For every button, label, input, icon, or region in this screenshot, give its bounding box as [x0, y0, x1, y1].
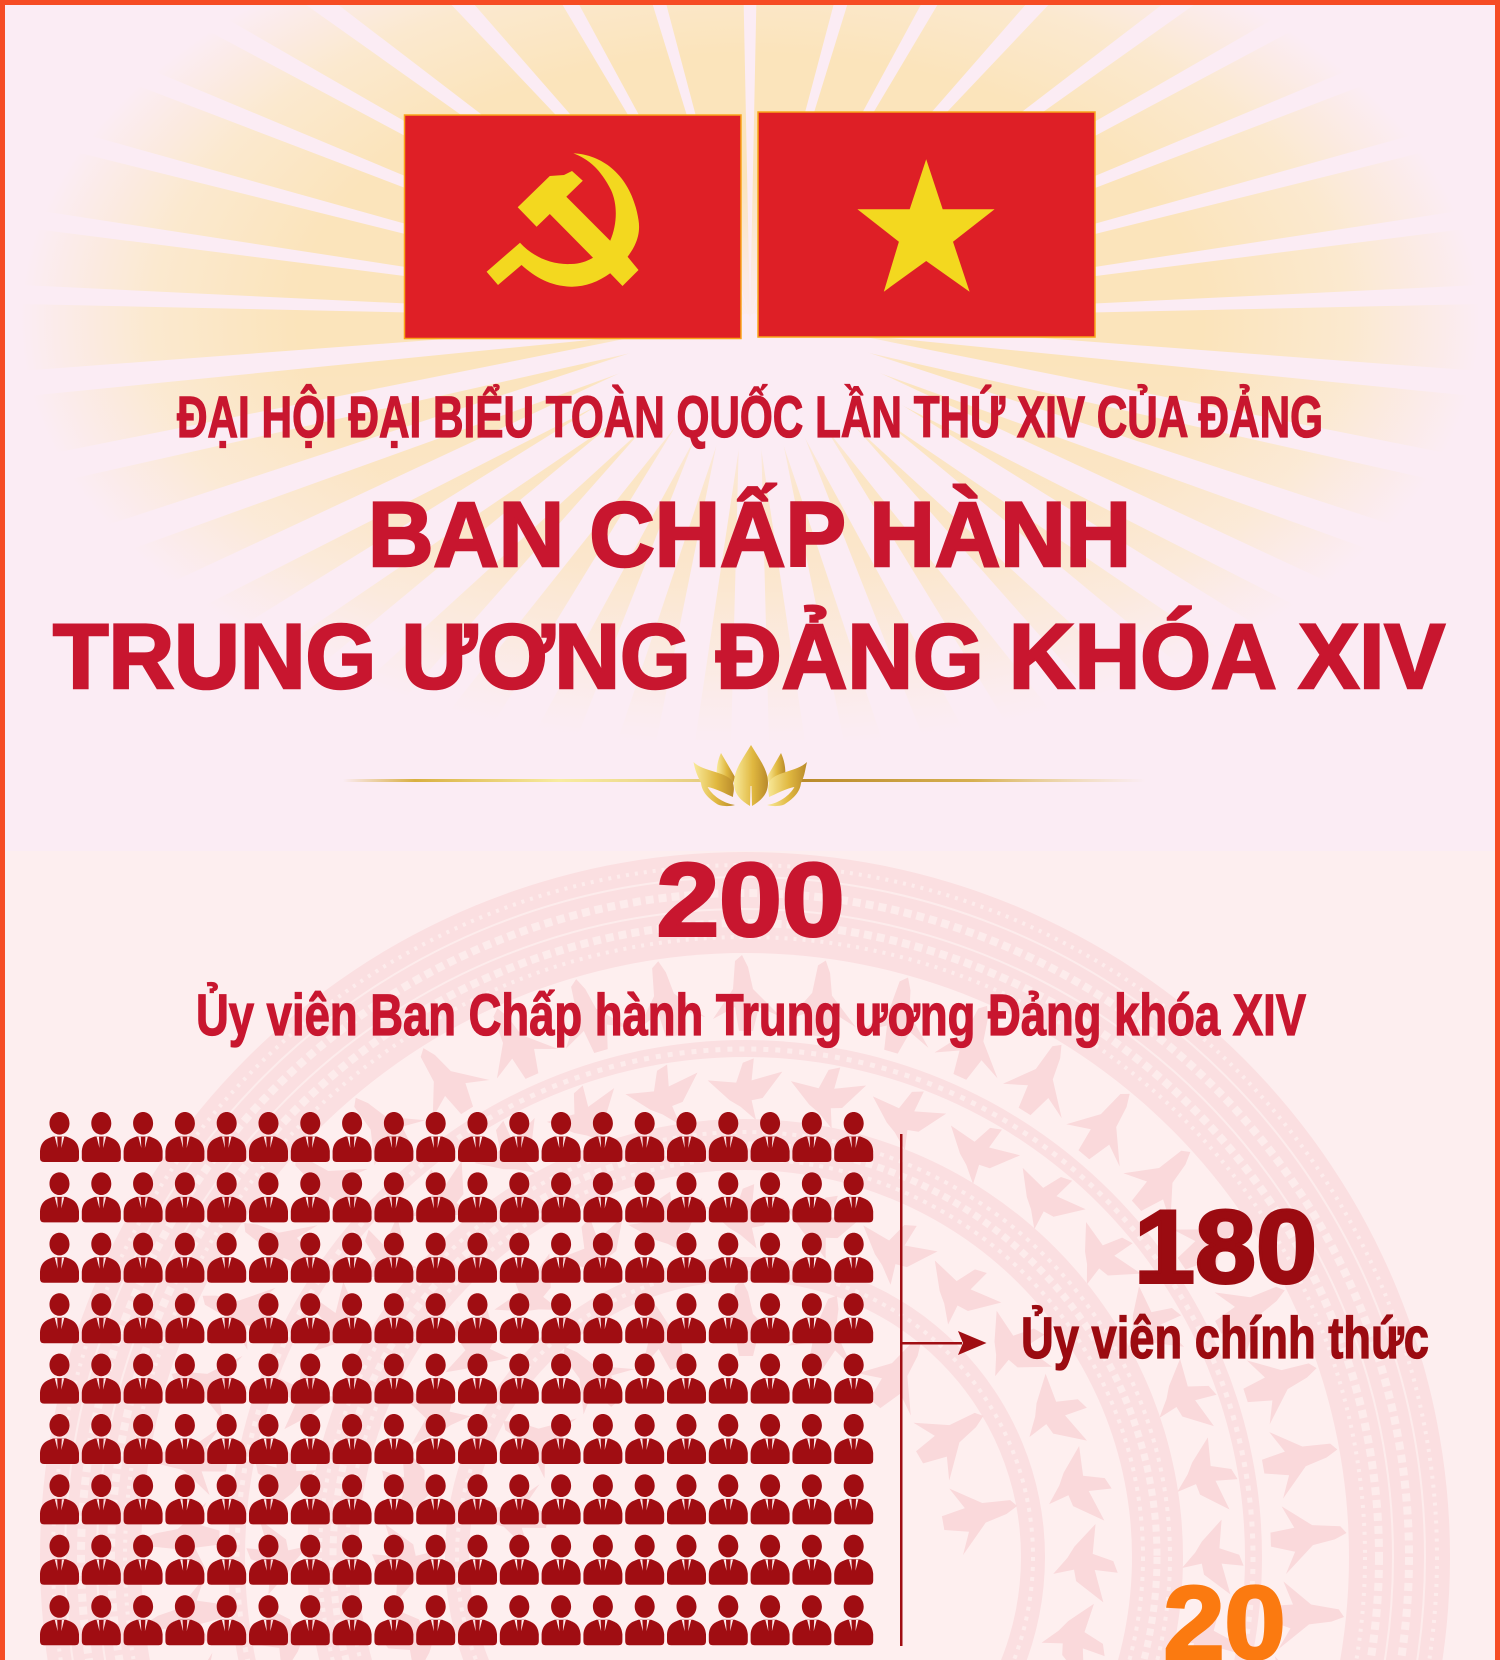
drum inner figure band: [246, 1058, 1244, 1660]
icon: gold star: [857, 159, 995, 292]
main title: [53, 483, 1445, 708]
party flag: [404, 115, 741, 338]
sun rays background: [49, 5, 1452, 704]
icon: lotus: [694, 745, 807, 806]
main title: TRUNG ƯƠNG ĐẢNG KHÓA XIV: [53, 605, 1445, 708]
people icon grid: [40, 1112, 873, 1645]
main title: BAN CHẤP HÀNH: [368, 483, 1131, 586]
national flag: [758, 112, 1095, 337]
bronze drum watermark: [40, 852, 1450, 1660]
official members count: 180: [1134, 1190, 1317, 1306]
icon: hammer and sickle: [487, 153, 639, 287]
lower section background: [0, 851, 1500, 1660]
drum bird band: [371, 1184, 1119, 1660]
bracket line: [900, 1134, 902, 1646]
divider with golden lotus: [343, 745, 1146, 806]
drum figure band: [142, 955, 1348, 1660]
drum innermost band: [467, 1280, 1024, 1558]
arrow: [902, 1331, 986, 1355]
total count: 200: [656, 842, 844, 958]
